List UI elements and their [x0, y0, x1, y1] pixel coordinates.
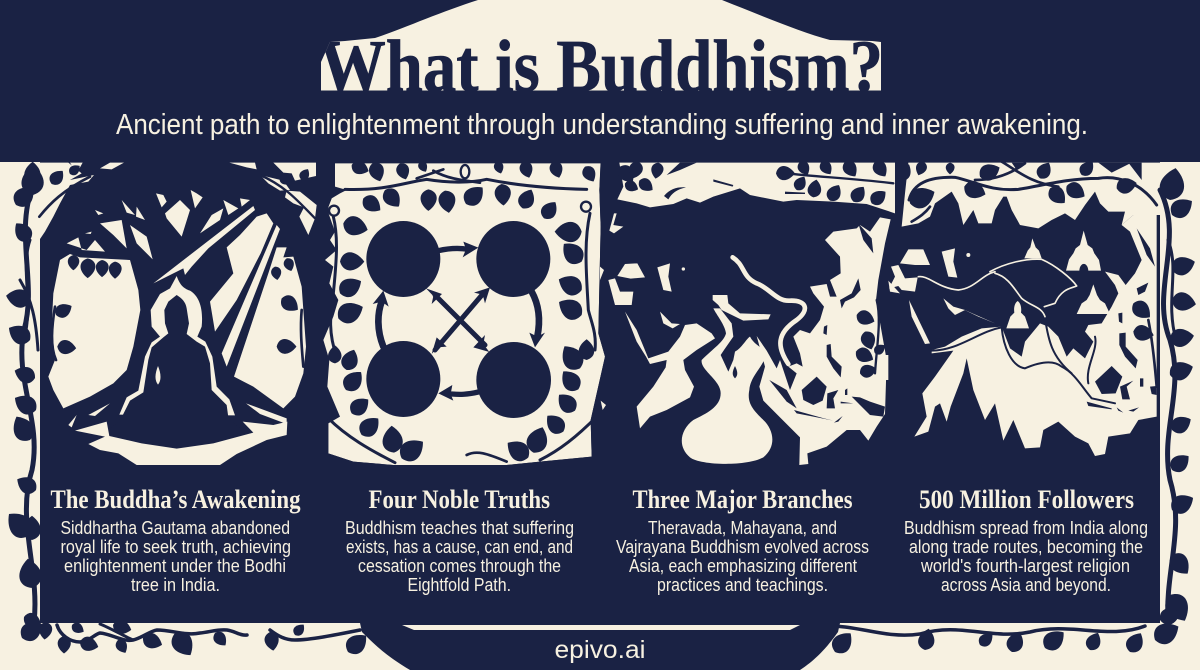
text block: three major branches: Three Major Branches: [632, 485, 852, 514]
panel: the Buddha's awakening illustration: [24, 162, 317, 465]
main navy field: [40, 162, 1160, 623]
icon: seated Buddha silhouette: [110, 276, 240, 428]
text block: the Buddha's awakening: [50, 485, 300, 595]
vine frame: [320, 158, 620, 470]
right border vine: [1158, 166, 1198, 626]
bottom left vine: [17, 610, 372, 661]
bottom right vine: [812, 605, 1183, 658]
panel: four noble truths illustration: [320, 158, 620, 470]
text block: three major branches: Vajrayana Buddhism evolved across: [616, 537, 869, 557]
text block: 500 million followers: across Asia and beyond.: [941, 575, 1111, 595]
arrows linking the truths: [373, 242, 545, 401]
central river branch: [713, 295, 771, 321]
text block: three major branches: practices and teachings.: [657, 575, 828, 595]
canopy gaps: [38, 163, 317, 259]
inland seas: [885, 248, 995, 380]
branching river: [733, 257, 805, 364]
upper vines and skyline: [894, 158, 1162, 228]
text block: four noble truths: exists, has a cause, can end, and: [346, 537, 573, 557]
text block: the Buddha's awakening: royal life to seek truth, achieving: [60, 537, 291, 557]
right window under the tree: [234, 247, 306, 408]
text block: three major branches: Asia, each emphasizing different: [629, 556, 857, 576]
northern sea and vine: [615, 158, 895, 213]
subtitle: Ancient path to enlightenment through understanding suffering and inner awakening.: [116, 109, 1088, 141]
header band: [0, 0, 1200, 162]
title banner: [321, 0, 881, 90]
text block: four noble truths: Eightfold Path.: [408, 575, 511, 595]
footer text: epivo.ai: [554, 636, 646, 664]
panel: three major branches map: [600, 158, 895, 465]
panel: 500 million followers map: [885, 158, 1162, 456]
title banner: What is Buddhism?: [319, 26, 883, 108]
cream paper window: [321, 163, 605, 465]
text block: 500 million followers: world's fourth-largest religion: [920, 556, 1130, 576]
ground and roots: [68, 403, 287, 465]
text block: four noble truths: cessation comes through the: [358, 556, 561, 576]
text block: four noble truths: Buddhism teaches that suffering: [345, 518, 574, 538]
text block: the Buddha's awakening: Siddhartha Gautama abandoned: [60, 518, 290, 538]
trade route lines: [918, 259, 1077, 317]
footer tab: [360, 623, 840, 670]
text block: 500 million followers: 500 Million Followers: [919, 485, 1134, 514]
text block: the Buddha's awakening: The Buddha’s Awakening: [50, 485, 300, 514]
text block: the Buddha's awakening: enlightenment under the Bodhi: [64, 556, 286, 576]
text block: three major branches: Theravada, Mahayana, and: [648, 518, 837, 538]
text block: 500 million followers: [904, 485, 1148, 595]
east Asia coast and islands: [757, 217, 891, 465]
eastern coast and sea: [914, 215, 1157, 456]
vessel shape river: [682, 308, 772, 464]
inland seas: [600, 213, 685, 410]
text block: 500 million followers: Buddhism spread from India along: [904, 518, 1148, 538]
text block: the Buddha's awakening: tree in India.: [131, 575, 220, 595]
text block: three major branches: [616, 485, 869, 595]
icon: temples and Buddha: [1006, 231, 1110, 328]
text block: four noble truths: Four Noble Truths: [368, 485, 550, 514]
navy sea-lanes: [915, 307, 1115, 403]
left border vine: [1, 165, 44, 622]
four circles: [366, 221, 551, 418]
India and Arabian land: [625, 312, 715, 428]
text block: four noble truths: [345, 485, 574, 595]
left window under the tree: [48, 254, 140, 408]
text block: 500 million followers: along trade routes, becoming the: [909, 537, 1143, 557]
light rays: [153, 206, 280, 367]
